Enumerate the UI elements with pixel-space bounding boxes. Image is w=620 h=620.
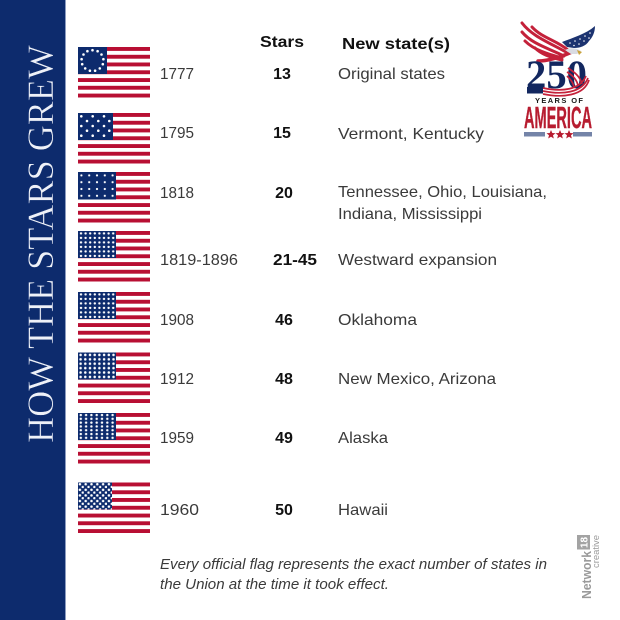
- year 1795: 1795: [160, 125, 194, 142]
- column heading: Stars: Stars: [260, 34, 304, 51]
- year range 1819-1896: 1819-1896: [160, 252, 238, 269]
- column heading: New state(s): New state(s): [342, 36, 450, 53]
- star count 50: 50: [275, 502, 293, 519]
- number 250: 250: [526, 52, 587, 97]
- icon: eagle blue star wing: [562, 26, 595, 48]
- icon: eagle red striped wing: [522, 23, 572, 61]
- icon: three stars and lines: [524, 130, 592, 138]
- states: Tennessee, Ohio, Louisiana, Indiana, Mississippi: Tennessee, Ohio, Louisiana,: [338, 184, 547, 201]
- states: Tennessee, Ohio, Louisiana, Indiana, Mississippi: [338, 184, 547, 223]
- flag: 1795: [78, 113, 150, 164]
- year 1960: 1960: [160, 502, 199, 519]
- icon: eagle head and beak: [565, 48, 582, 55]
- flag: 1960: [78, 482, 150, 533]
- flag: 1818: [78, 172, 150, 222]
- year 1908: 1908: [160, 312, 194, 329]
- states: Tennessee, Ohio, Louisiana, Indiana, Mississippi: Indiana, Mississippi: [338, 206, 482, 223]
- footnote: Every official flag represents the exact number of states in: [160, 557, 547, 573]
- states: Hawaii: Hawaii: [338, 502, 388, 519]
- flag: 1912: [78, 352, 150, 403]
- states: Westward expansion: Westward expansion: [338, 252, 497, 269]
- icon: ribbon stripes: [527, 68, 589, 96]
- footnote: the Union at the time it took effect.: [160, 577, 389, 593]
- Network18 creative logo: Network: [580, 551, 594, 599]
- states: New Mexico, Arizona: New Mexico, Arizona: [338, 371, 496, 388]
- star count 13: 13: [273, 66, 291, 83]
- sidebar panel: [0, 0, 66, 620]
- Network18 creative logo: creative: [591, 535, 601, 568]
- flag: 1959: [78, 413, 150, 464]
- logo: 250 Years of America: [522, 23, 595, 138]
- star count 21-45: 21-45: [273, 252, 317, 269]
- star count 49: 49: [275, 430, 293, 447]
- footnote: [160, 557, 547, 593]
- flag: 1819-1896: [78, 231, 150, 282]
- text: Years of: YEARS OF: [535, 96, 583, 105]
- star count 46: 46: [275, 312, 293, 329]
- flag: 1777: [78, 47, 150, 98]
- year 1912: 1912: [160, 371, 194, 388]
- states: Alaska: Alaska: [338, 430, 388, 447]
- Network18 creative logo: 18: [580, 537, 590, 548]
- year 1777: 1777: [160, 66, 194, 83]
- states: Vermont, Kentucky: Vermont, Kentucky: [338, 126, 484, 143]
- star count 48: 48: [275, 371, 293, 388]
- states: Oklahoma: Oklahoma: [338, 312, 417, 329]
- star count 20: 20: [275, 185, 293, 202]
- title: How the Stars Grew: HOW THE STARS GREW: [21, 45, 62, 443]
- year 1818: 1818: [160, 185, 194, 202]
- star count 15: 15: [273, 125, 291, 142]
- states: Original states: Original states: [338, 66, 445, 83]
- Network18 creative logo: [577, 535, 601, 599]
- year 1959: 1959: [160, 430, 194, 447]
- flag: 1908: [78, 292, 150, 342]
